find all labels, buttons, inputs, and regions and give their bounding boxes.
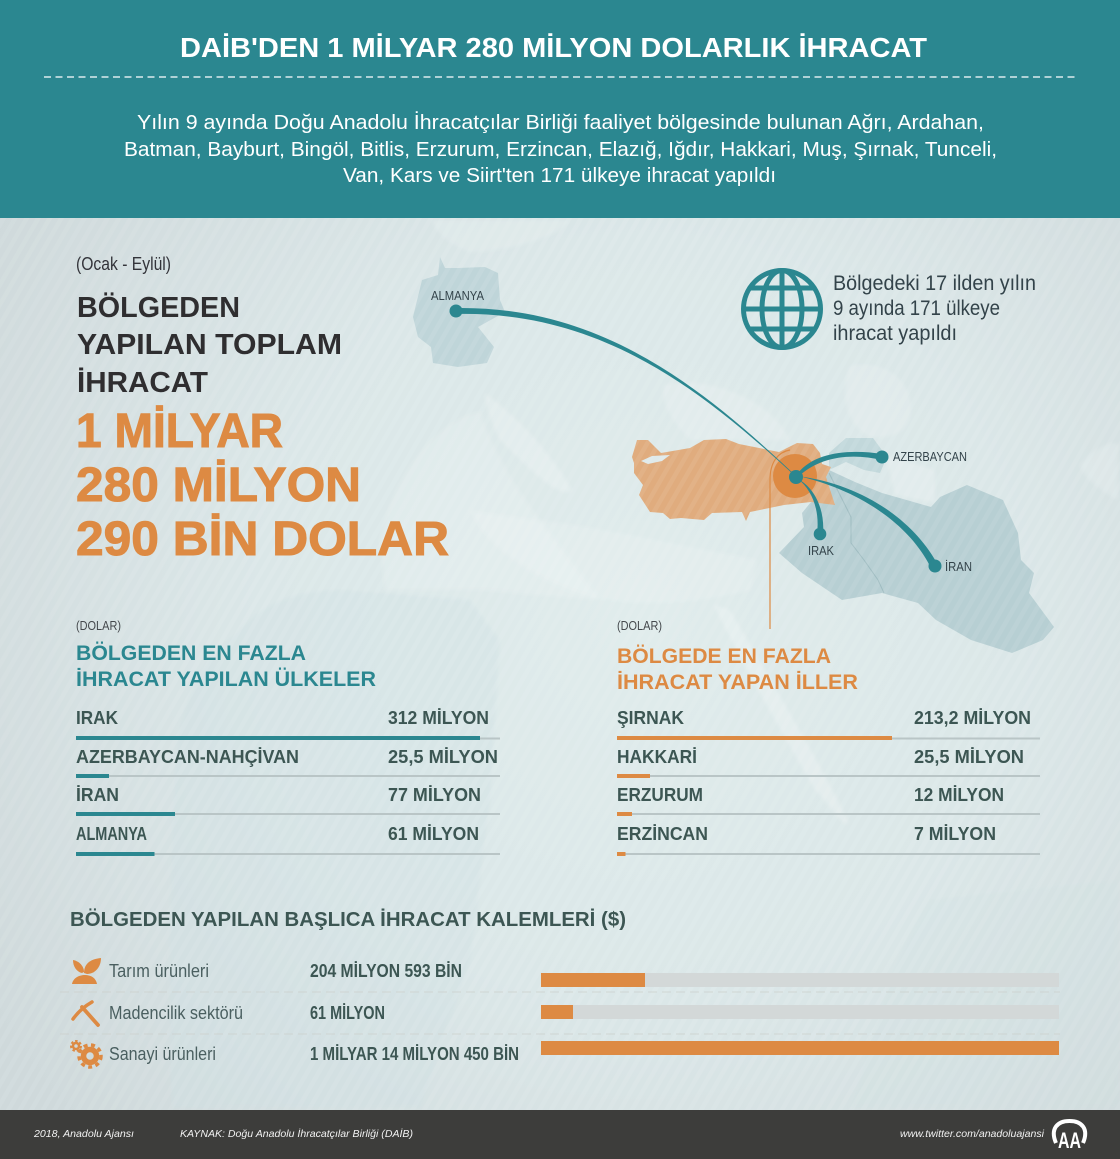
icon: globe [744, 270, 820, 348]
bar tracks and values [76, 736, 500, 856]
logo: AA [1054, 1121, 1085, 1153]
total export value: 1 MİLYAR [76, 405, 283, 458]
province values: 12 MİLYON [914, 785, 1004, 805]
item names [109, 961, 243, 1064]
total export value [76, 405, 449, 566]
item names: Madencilik sektörü [109, 1003, 243, 1023]
heading: countries: BÖLGEDEN EN FAZLA [76, 642, 306, 665]
icon: gears [71, 1041, 101, 1067]
globe note: 9 ayında 171 ülkeye [833, 297, 1000, 320]
country labels: İRAN [945, 560, 972, 574]
period note: (Ocak - Eylül) [76, 254, 171, 274]
item names: Tarım ürünleri [109, 961, 209, 981]
icon: pickaxe [73, 1002, 98, 1025]
panel: main export items [60, 908, 1060, 1067]
map: Marmara sea [641, 455, 670, 464]
subtitle: Yılın 9 ayında Doğu Anadolu İhracatçılar Birliği faaliyet bölgesinde bulunan Ağrı, Ardahan, [137, 111, 984, 134]
map: routes and markers [431, 289, 972, 629]
country names: IRAK [76, 708, 118, 728]
arrow: to Germany [456, 308, 796, 477]
marker dots [450, 304, 942, 572]
heading: provinces [617, 645, 858, 694]
country values: 77 MİLYON [388, 785, 481, 805]
country names: ALMANYA [76, 824, 147, 844]
bar tracks and values [617, 736, 1040, 856]
country names [76, 708, 299, 844]
heading: countries: İHRACAT YAPILAN ÜLKELER [76, 668, 376, 691]
heading: provinces: İHRACAT YAPAN İLLER [617, 671, 858, 694]
country names: AZERBAYCAN-NAHÇİVAN [76, 747, 299, 767]
map: DAİB region highlight [773, 454, 817, 498]
map: Azerbaijan and Caucasus [829, 438, 887, 473]
heading: export items: BÖLGEDEN YAPILAN BAŞLICA İHRACAT KALEMLERİ ($) [70, 908, 626, 931]
total export heading: YAPILAN TOPLAM [77, 329, 342, 361]
item values: 1 MİLYAR 14 MİLYON 450 BİN [310, 1044, 519, 1064]
footer [0, 1110, 1120, 1159]
total export heading: İHRACAT [77, 367, 208, 399]
arrow: to Iraq [798, 479, 823, 534]
country labels: AZERBAYCAN [893, 450, 967, 464]
subtitle [124, 111, 997, 187]
item values [310, 961, 519, 1064]
logo: AA: AA [1058, 1128, 1081, 1153]
subtitle: Batman, Bayburt, Bingöl, Bitlis, Erzurum, Erzincan, Elazığ, Iğdır, Hakkari, Muş, Şırnak, Tunceli, [124, 139, 997, 161]
heading: countries [76, 642, 376, 691]
province names: HAKKARİ [617, 747, 697, 767]
globe note: Bölgedeki 17 ilden yılın [833, 272, 1036, 295]
globe note [833, 272, 1036, 345]
panel: top countries [76, 618, 500, 856]
arrow: to Azerbaijan [798, 452, 882, 477]
background map panel [0, 218, 1120, 1110]
country labels: ALMANYA [431, 289, 485, 303]
unit note: (DOLAR) [617, 618, 662, 633]
country values: 61 MİLYON [388, 824, 479, 844]
province names [617, 708, 708, 844]
country names: İRAN [76, 785, 119, 805]
map: Iran-Iraq border [829, 473, 884, 593]
unit note: (DOLAR) [76, 618, 121, 633]
total export value: 280 MİLYON [76, 459, 361, 512]
country labels: IRAK [808, 544, 835, 558]
twitter: www.twitter.com/anadoluajansi [900, 1128, 1045, 1140]
country values: 312 MİLYON [388, 708, 489, 728]
map: Germany [413, 257, 505, 367]
item values: 204 MİLYON 593 BİN [310, 961, 462, 981]
globe note: ihracat yapıldı [833, 322, 957, 345]
item values: 61 MİLYON [310, 1003, 385, 1023]
panel: top provinces [617, 618, 1040, 856]
country values: 25,5 MİLYON [388, 747, 498, 767]
province names: ERZİNCAN [617, 824, 708, 844]
province names: ERZURUM [617, 785, 703, 805]
total export heading: BÖLGEDEN [77, 291, 240, 324]
icon: plant [72, 958, 101, 984]
header band [0, 0, 1120, 218]
map: Iran and Iraq [779, 470, 1054, 653]
total export heading [77, 291, 342, 399]
item names: Sanayi ürünleri [109, 1044, 216, 1064]
province values: 213,2 MİLYON [914, 708, 1031, 728]
heading: provinces: BÖLGEDE EN FAZLA [617, 645, 831, 668]
country values [388, 708, 498, 844]
map: highlighted countries [413, 257, 1054, 653]
province values: 7 MİLYON [914, 824, 996, 844]
province values [914, 708, 1031, 844]
country labels [431, 289, 972, 574]
title: DAİB'DEN 1 MİLYAR 280 MİLYON DOLARLIK İHRACAT [180, 32, 927, 63]
copyright: 2018, Anadolu Ajansı [33, 1128, 134, 1140]
map: Turkey [632, 439, 835, 521]
bar chart: export items [541, 973, 1059, 1055]
province values: 25,5 MİLYON [914, 747, 1024, 767]
total export value: 290 BİN DOLAR [76, 513, 449, 566]
province names: ŞIRNAK [617, 708, 684, 728]
arrow: to Iran [798, 476, 938, 568]
subtitle: Van, Kars ve Siirt'ten 171 ülkeye ihracat yapıldı [343, 165, 776, 187]
leader line to provinces list [770, 450, 790, 629]
source: KAYNAK: Doğu Anadolu İhracatçılar Birliği (DAİB) [180, 1128, 413, 1140]
